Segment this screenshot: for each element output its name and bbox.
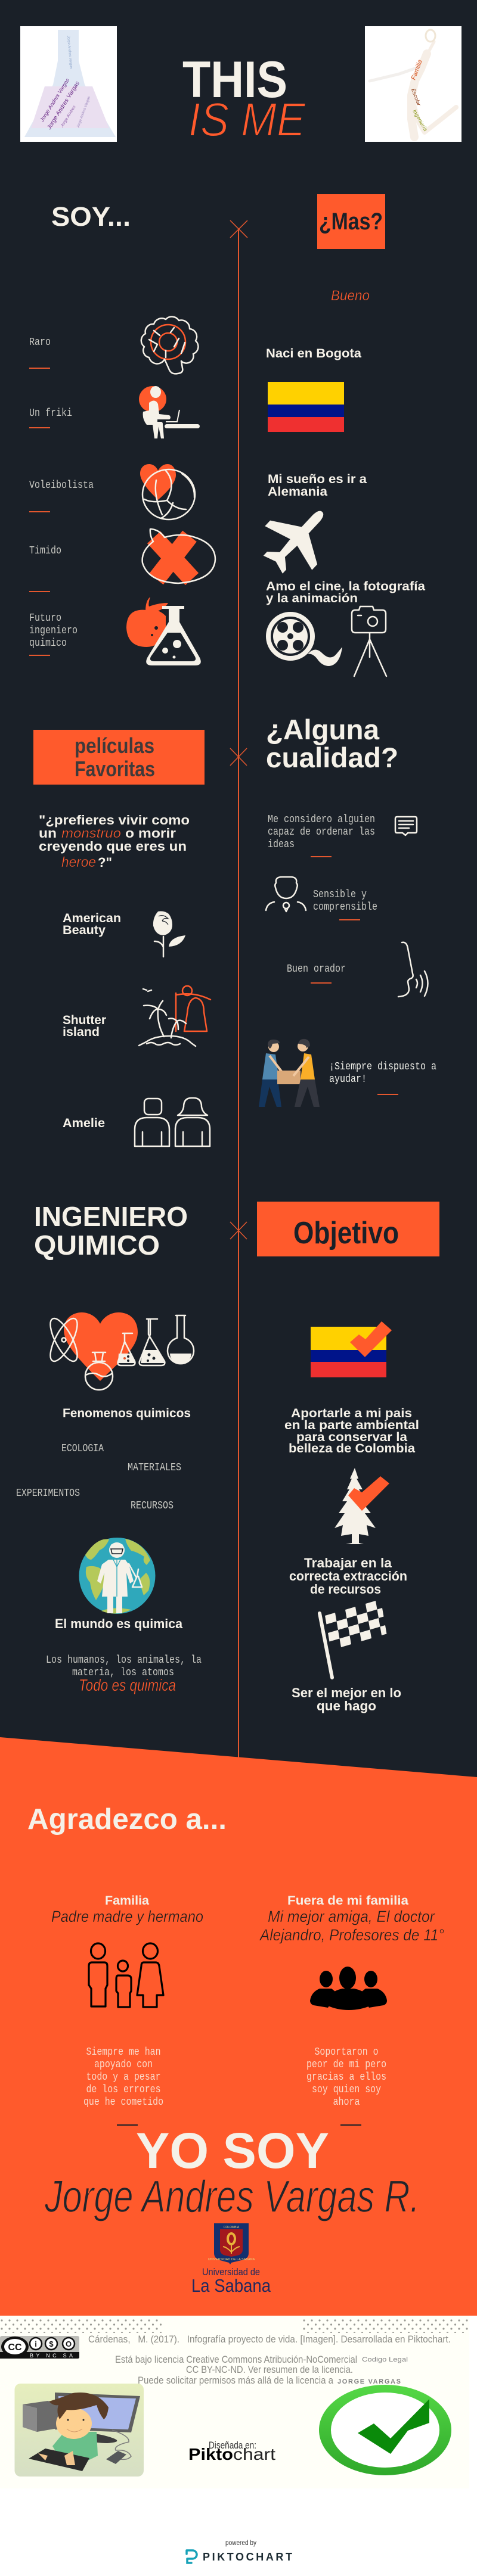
icon: tree with checkmark	[334, 1468, 389, 1544]
icon: speech bubble cross	[143, 529, 215, 583]
icon: creative commons badge: BY NC SA	[30, 2353, 73, 2359]
panel: peliculas heading: películas	[75, 733, 154, 758]
text: trabajar: de recursos	[310, 1582, 381, 1597]
item: siempre dispuesto: ¡Siempre dispuesto a	[329, 1061, 436, 1073]
item: raro	[29, 337, 51, 369]
item: american beauty: American	[63, 911, 121, 925]
icon: creative commons badge: $	[49, 2339, 54, 2348]
image: person at computer	[14, 2384, 144, 2477]
heading: soy: SOY...	[51, 201, 131, 232]
item: timido: Timido	[29, 545, 61, 557]
item: voleibolista: Voleibolista	[29, 480, 94, 491]
text: mi sueño: Alemania	[268, 485, 327, 499]
item: raro: Raro	[29, 337, 51, 349]
icon: airplane	[249, 490, 346, 587]
icon: island and reaper	[139, 986, 210, 1046]
marker: cross top	[230, 220, 247, 238]
item: futuro ingeniero: ingeniero	[29, 625, 78, 637]
text: license credits	[88, 2334, 451, 2386]
text: siempre me han apoyado: todo y a pesar	[86, 2071, 161, 2083]
heading: ingeniero quimico	[34, 1201, 188, 1261]
icon: speaking face	[398, 942, 428, 997]
text: fuera de mi familia: Mi mejor amiga, El doctor	[268, 1908, 435, 1925]
image: flask word cloud	[20, 26, 117, 142]
item: un friki: Un friki	[29, 407, 72, 419]
item: capaz de ordenar: capaz de ordenar las	[268, 826, 375, 838]
text: areas of chemistry	[16, 1443, 181, 1512]
image: flask word cloud: Jorge Andres Vargas	[66, 35, 73, 69]
item: capaz de ordenar: Me considero alguien	[268, 814, 375, 826]
text: soportaron	[306, 2046, 386, 2108]
image: flask word cloud: Jorge Andres Vargas	[39, 77, 70, 123]
text: quote: o morir	[125, 826, 176, 841]
logo: universidad de la sabana: UNIVERSIDAD DE LA SABANA	[208, 2258, 255, 2261]
text: fuera de mi familia	[259, 1894, 444, 1944]
icon: heart with chemistry glassware	[45, 1312, 194, 1390]
text: soportaron: Soportaron o	[315, 2046, 378, 2058]
text: areas of chemistry: EXPERIMENTOS	[16, 1488, 80, 1499]
icon: film reel	[268, 614, 342, 666]
text: soportaron: soy quien soy	[312, 2084, 381, 2096]
icon: heart and volleyball	[140, 464, 195, 519]
text: quote: heroe	[61, 854, 96, 870]
item: un friki	[29, 407, 72, 428]
item: buen orador: Buen orador	[287, 963, 346, 975]
icon: green check	[319, 2385, 451, 2475]
icon: checkered flag	[320, 1599, 386, 1678]
text: areas of chemistry: ECOLOGIA	[61, 1443, 104, 1455]
item: capaz de ordenar	[268, 814, 375, 857]
text: aportarle	[284, 1407, 419, 1455]
image: jumping person word cloud	[365, 26, 461, 142]
text: trabajar: Trabajar en la	[304, 1555, 392, 1570]
icon: rose	[153, 911, 185, 957]
text: designed in piktochart	[188, 2440, 275, 2463]
item: sensible: comprensible	[313, 901, 377, 913]
text: familia	[51, 1894, 203, 1925]
text: mi sueño	[268, 472, 367, 499]
heading: alguna cualidad: ¿Alguna	[266, 714, 380, 745]
item: american beauty	[63, 911, 121, 937]
text: amo el cine: Amo el cine, la fotografía	[266, 580, 425, 593]
heading: yo soy: YO SOY	[136, 2123, 329, 2179]
icon: colombia flag	[268, 382, 344, 432]
icon: creative commons badge: CC	[8, 2342, 22, 2353]
logo: universidad de la sabana	[191, 2223, 271, 2296]
icon: people carrying a box	[259, 1039, 320, 1107]
item: sensible: Sensible y	[313, 889, 367, 901]
panel: footer credits	[0, 2316, 469, 2488]
text: aportarle: belleza de Colombia	[289, 1442, 415, 1455]
text: soportaron: gracias a ellos	[306, 2071, 386, 2083]
icon: person with laptop	[139, 386, 200, 438]
text: quote: un	[39, 826, 57, 841]
text: trabajar	[289, 1555, 407, 1597]
image: flask word cloud: Jorge Andres Vargas	[76, 96, 91, 129]
icon: family	[89, 1943, 163, 2007]
item: siempre dispuesto	[329, 1061, 436, 1095]
item: futuro ingeniero	[29, 612, 78, 656]
text: todo es quimica: materia, los atomos	[72, 1667, 174, 1679]
heading: ingeniero quimico: INGENIERO	[34, 1201, 188, 1232]
panel: objetivo heading	[257, 1202, 439, 1256]
item: shutter island: island	[63, 1025, 100, 1039]
text: quote: ?"	[98, 855, 112, 870]
panel: peliculas heading	[33, 730, 205, 785]
text: trabajar: correcta extracción	[289, 1569, 407, 1583]
icon: person outline	[266, 877, 306, 911]
text: siempre me han apoyado: de los errores	[86, 2084, 161, 2096]
item: american beauty: Beauty	[63, 923, 106, 937]
item: siempre dispuesto: ayudar!	[329, 1074, 367, 1085]
text: fuera de mi familia: Fuera de mi familia	[287, 1894, 408, 1908]
logo: universidad de la sabana: Universidad de	[202, 2266, 260, 2278]
item: buen orador	[287, 963, 346, 984]
panel: orange closing section	[0, 1737, 477, 2316]
text: fuera de mi familia: Alejandro, Profesores de 11°	[259, 1926, 444, 1944]
text: amo el cine: y la animación	[266, 592, 358, 605]
text: areas of chemistry: MATERIALES	[128, 1462, 181, 1474]
text: license credits: Puede solicitar permisos más allá de la licencia a	[138, 2375, 333, 2386]
text: siempre me han apoyado	[83, 2046, 163, 2108]
panel: objetivo heading: Objetivo	[293, 1216, 399, 1250]
panel: mas heading: ¿Mas?	[319, 209, 383, 235]
text: familia: Padre madre y hermano	[51, 1908, 203, 1925]
text: aportarle: Aportarle a mi pais	[291, 1407, 412, 1420]
heading: ingeniero quimico: QUIMICO	[34, 1230, 160, 1261]
text: familia: Familia	[105, 1894, 149, 1908]
text: aportarle: para conservar la	[296, 1430, 407, 1444]
item: futuro ingeniero: Futuro	[29, 612, 61, 624]
text: quote: "¿prefieres vivir como	[39, 813, 190, 827]
icon: camera on tripod	[352, 606, 386, 676]
marker: cross middle	[230, 748, 247, 766]
text: license credits: Está bajo licencia Creative Commons Atribución-NoComercial	[115, 2354, 357, 2365]
text: license credits: CC BY-NC-ND. Ver resumen de la licencia.	[186, 2364, 353, 2375]
icon: creative commons badge: O	[66, 2339, 72, 2348]
icon: globe with scientist	[79, 1538, 155, 1614]
text: areas of chemistry: RECURSOS	[131, 1500, 174, 1512]
icon: group silhouette	[310, 1967, 387, 2010]
image: flask word cloud: Jorge Andres	[60, 105, 77, 129]
icon: creative commons badge: i	[35, 2339, 37, 2348]
text: quote: monstruo	[61, 826, 121, 841]
heading: alguna cualidad: cualidad?	[266, 742, 398, 773]
text: soportaron: ahora	[333, 2096, 360, 2108]
item: amelie: Amelie	[63, 1116, 105, 1130]
image: jumping person word cloud: Familia	[410, 59, 424, 81]
icon: chat	[395, 817, 417, 835]
item: sensible	[313, 889, 377, 920]
text: todo es quimica: Los humanos, los animales, la	[46, 1654, 202, 1666]
text: siempre me han apoyado: que he cometido	[83, 2096, 163, 2108]
text: ser el mejor: Ser el mejor en lo	[292, 1685, 401, 1700]
title: IS ME	[188, 93, 306, 146]
image: jumping person word cloud: Escolar	[410, 88, 422, 107]
heading: alguna cualidad	[266, 714, 398, 773]
text: quote: creyendo que eres un	[39, 839, 187, 854]
icon: couple outlines	[135, 1098, 210, 1146]
text: naci en bogota: Naci en Bogota	[266, 347, 361, 360]
image: flask word cloud: Jorge Andres Vargas	[46, 80, 81, 131]
text: aportarle: en la parte ambiental	[284, 1418, 419, 1432]
text: siempre me han apoyado: apoyado con	[94, 2059, 153, 2071]
text: amo el cine	[266, 580, 425, 605]
icon: creative commons badge	[0, 2336, 79, 2359]
text: ser el mejor: que hago	[317, 1698, 376, 1713]
text: license credits: JORGE VARGAS	[337, 2378, 401, 2385]
text: todo es quimica	[46, 1654, 202, 1694]
item: shutter island: Shutter	[63, 1013, 106, 1027]
text: bueno: Bueno	[331, 288, 370, 304]
text: designed in piktochart: chart	[233, 2445, 275, 2463]
item: futuro ingeniero: quimico	[29, 637, 67, 649]
marker: cross lower	[230, 1222, 247, 1239]
icon: apple and flask	[126, 597, 201, 665]
text: fenomenos quimicos: Fenomenos quimicos	[63, 1407, 191, 1420]
text: powered by: powered by	[225, 2538, 256, 2547]
item: capaz de ordenar: ideas	[268, 839, 295, 851]
panel: mas heading	[317, 194, 385, 249]
icon: brain	[141, 317, 198, 374]
text: designed in piktochart: Diseñada en:	[209, 2440, 256, 2451]
item: voleibolista	[29, 480, 94, 512]
item: shutter island	[63, 1013, 106, 1039]
logo: universidad de la sabana: La Sabana	[191, 2275, 271, 2296]
text: todo es quimica: Todo es quimica	[79, 1676, 176, 1694]
heading: agradezco: Agradezco a...	[27, 1803, 227, 1835]
text: siempre me han apoyado: Siempre me han	[86, 2046, 161, 2058]
title	[182, 51, 306, 146]
item: timido	[29, 545, 61, 592]
text: mi sueño: Mi sueño es ir a	[268, 472, 367, 486]
icon: flag with checkmark	[311, 1321, 392, 1377]
panel: peliculas heading: Favoritas	[75, 757, 155, 781]
text: designed in piktochart: Pikto	[188, 2445, 233, 2463]
text: license credits: Codigo Legal	[362, 2356, 408, 2363]
title: THIS	[182, 51, 287, 108]
text: soportaron: peor de mi pero	[306, 2059, 386, 2071]
text: quote	[39, 813, 190, 870]
image: jumping person word cloud: Ingeniería	[411, 108, 429, 132]
text: el mundo es quimica: El mundo es quimica	[55, 1616, 183, 1631]
text: ser el mejor	[292, 1685, 401, 1713]
logo: piktochart: PIKTOCHART	[203, 2551, 292, 2563]
logo: universidad de la sabana: COLOMBIA	[224, 2226, 240, 2229]
